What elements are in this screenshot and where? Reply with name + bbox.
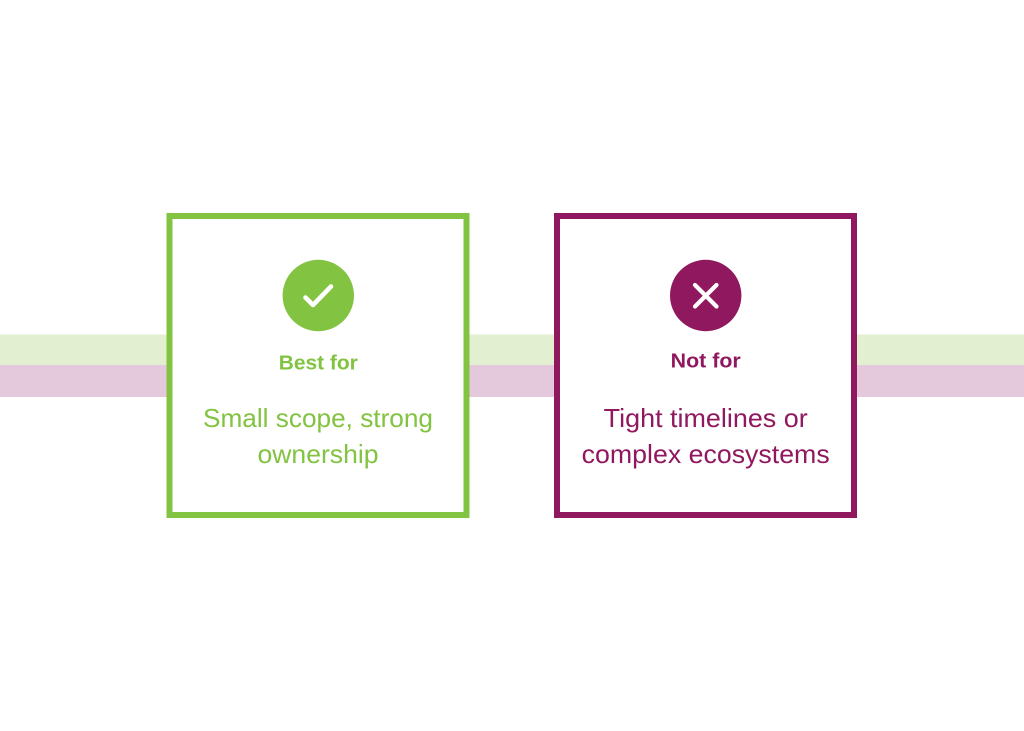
icon: check mark [283, 260, 354, 331]
heading: best for: Best for [279, 352, 358, 374]
green background band [0, 334, 1024, 365]
panel frame: not for [557, 216, 854, 515]
heading: not for: Not for [671, 350, 741, 372]
panel: not for [557, 216, 854, 515]
panel frame: best for [170, 216, 466, 515]
text: not for description: Tight timelines or [604, 403, 808, 433]
text: best for description: ownership [258, 439, 378, 469]
text: best for description [203, 403, 433, 469]
text: not for description [582, 403, 830, 469]
panel: best for [170, 216, 466, 515]
icon: cross mark [670, 260, 741, 331]
purple background band [0, 365, 1024, 397]
text: best for description: Small scope, strong [203, 403, 433, 433]
text: not for description: complex ecosystems [582, 439, 830, 469]
